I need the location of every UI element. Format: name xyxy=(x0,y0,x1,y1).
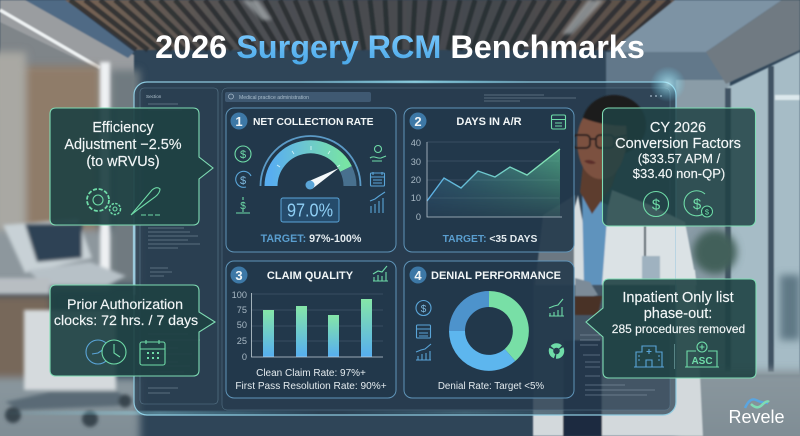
area chart: 0 xyxy=(416,212,421,222)
icon: dollar with coin: $ xyxy=(705,208,710,216)
callout: prior authorization: Prior Authorization xyxy=(67,297,183,313)
dashboard frame xyxy=(0,66,686,415)
bar chart: 25 xyxy=(237,336,247,346)
icons left xyxy=(235,146,251,213)
search bar: Medical practice administration xyxy=(239,95,309,101)
heading: claim quality: CLAIM QUALITY xyxy=(267,270,354,282)
bar chart: 100 xyxy=(232,290,247,300)
number badge 2: 2 xyxy=(414,114,422,129)
icon: dollar circle: $ xyxy=(652,196,661,214)
logo: Revele: Revele xyxy=(728,407,785,427)
callout: inpatient only list: 285 procedures removed xyxy=(612,322,745,336)
bar chart: 0 xyxy=(242,352,247,362)
gauge xyxy=(260,136,360,190)
heading: denial performance: DENIAL PERFORMANCE xyxy=(431,270,561,282)
callout: CY 2026 conversion factors: Conversion Factors xyxy=(615,136,741,152)
icon: dollar with coin xyxy=(684,191,712,217)
icon: dollar with coin: $ xyxy=(693,196,702,213)
donut chart xyxy=(457,299,521,363)
number badge 1: 1 xyxy=(235,114,243,129)
icon: calendar xyxy=(140,340,165,365)
callout: inpatient only list: phase-out: xyxy=(644,306,712,322)
icons left: $ xyxy=(240,149,246,161)
callout: CY 2026 conversion factors: $33.40 non-QP) xyxy=(633,166,725,181)
panel 1: net collection rate xyxy=(226,108,396,252)
icons left: $ xyxy=(421,304,427,315)
number badge 3: 3 xyxy=(235,268,243,283)
target text: TARGET: <35 DAYS xyxy=(443,234,537,245)
callout: prior authorization xyxy=(50,285,215,376)
callout: inpatient only list: Inpatient Only list xyxy=(622,290,734,306)
area chart: 30 xyxy=(411,157,421,167)
icon: scalpel xyxy=(131,188,161,215)
callout: CY 2026 conversion factors: CY 2026 xyxy=(650,120,706,136)
icon: calendar xyxy=(552,115,566,129)
icons left: $ xyxy=(240,201,246,212)
icon: ASC building xyxy=(685,342,719,367)
title: 2026 Surgery RCM Benchmarks xyxy=(155,29,645,65)
denial rate text: Denial Rate: Target <5% xyxy=(438,381,544,392)
callout: prior authorization: clocks: 72 hrs. / 7 days xyxy=(54,313,198,329)
number badge 2 xyxy=(410,112,426,130)
icon: hospital xyxy=(634,346,664,367)
icon: dollar circle xyxy=(644,192,668,216)
sidebar text xyxy=(146,94,200,393)
panel 4: denial performance xyxy=(404,261,574,398)
bar chart xyxy=(232,290,383,362)
sidebar text: Section xyxy=(146,94,162,99)
target text: TARGET: 97%-100% xyxy=(261,233,362,245)
icons left: $ xyxy=(240,175,246,187)
document text behind xyxy=(580,335,655,395)
doctor upper body and head xyxy=(535,95,697,315)
panel 3: claim quality xyxy=(226,261,396,398)
search bar xyxy=(225,92,371,102)
gauge value: 97.0% xyxy=(287,200,333,220)
bar chart: 75 xyxy=(237,305,247,315)
metrics text xyxy=(235,368,387,392)
number badge 4: 4 xyxy=(414,268,422,283)
callout: efficiency adjustment: Efficiency xyxy=(92,120,154,136)
area chart: 10 xyxy=(411,193,421,203)
number badge 3 xyxy=(230,266,248,284)
icon: clocks xyxy=(86,340,126,364)
icons right xyxy=(549,299,564,356)
callout: inpatient only list xyxy=(586,279,756,378)
bar chart: 50 xyxy=(237,320,247,330)
panel 2: days in A/R xyxy=(404,108,574,252)
frame glow lines xyxy=(0,66,686,415)
metrics text: Clean Claim Rate: 97%+ xyxy=(256,368,366,379)
doctor lower body behind dashboard xyxy=(533,270,703,436)
icon: ASC building: ASC xyxy=(691,356,713,367)
number badge 1 xyxy=(230,112,248,130)
callout: efficiency adjustment xyxy=(50,108,213,225)
icons right xyxy=(370,146,386,213)
callout: efficiency adjustment: Adjustment −2.5% xyxy=(64,137,182,153)
callout: CY 2026 conversion factors xyxy=(602,108,756,226)
number badge 4 xyxy=(410,266,426,284)
callout: CY 2026 conversion factors: ($33.57 APM / xyxy=(638,151,721,166)
callout: efficiency adjustment: (to wRVUs) xyxy=(86,154,160,170)
heading: days in A/R: DAYS IN A/R xyxy=(456,116,522,128)
icon: gears xyxy=(87,189,120,214)
area chart: 40 xyxy=(411,138,421,148)
area chart xyxy=(411,138,562,222)
header details xyxy=(484,95,662,101)
area chart: 20 xyxy=(411,175,421,185)
icons left xyxy=(416,300,431,360)
heading: net collection rate: NET COLLECTION RATE xyxy=(253,117,374,128)
metrics text: First Pass Resolution Rate: 90%+ xyxy=(235,381,387,392)
icon: growth chart xyxy=(373,266,388,281)
